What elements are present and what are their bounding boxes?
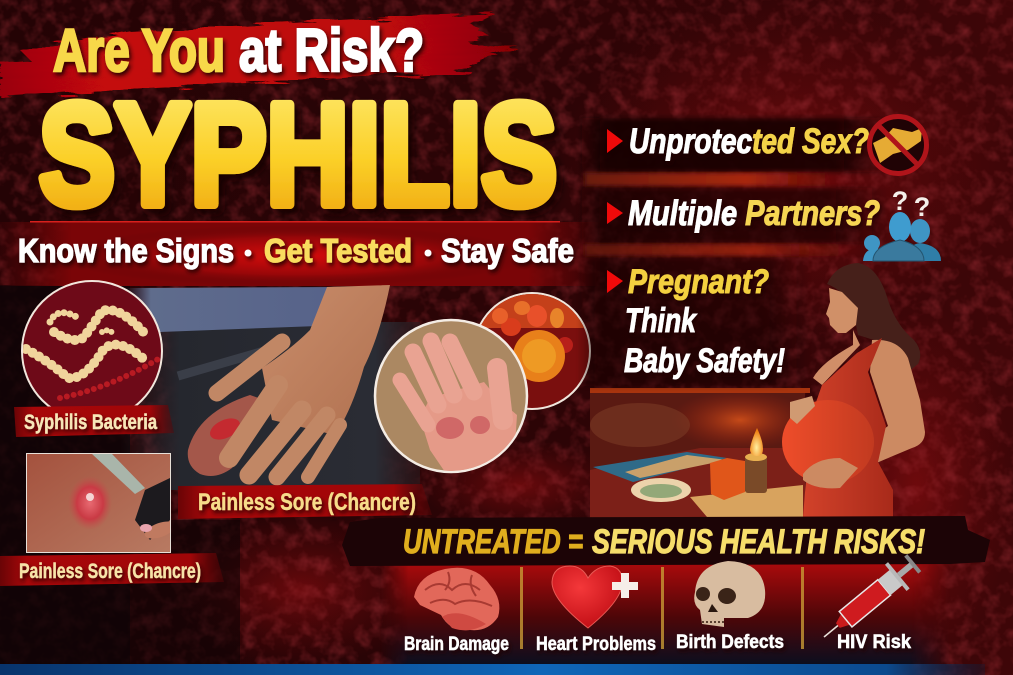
heading: Are You at Risk?	[53, 17, 424, 84]
label: Syphilis Bacteria: Syphilis Bacteria	[24, 411, 157, 434]
row: Multiple Partners	[607, 194, 880, 233]
banner: untreated: UNTREATED =	[403, 523, 583, 561]
row: Pregnant	[607, 263, 785, 380]
illustration: pregnant woman	[782, 263, 925, 517]
icon: palm circle with rash	[375, 320, 527, 472]
text: Baby Safety!	[624, 342, 785, 380]
icon: syringe	[813, 549, 925, 650]
bowl	[631, 478, 691, 502]
tagline: Know the Signs	[18, 232, 234, 269]
orange cube	[710, 458, 745, 500]
heading brush stroke	[0, 12, 520, 98]
tagline: Get Tested	[264, 232, 412, 269]
icon labels	[404, 632, 911, 655]
arrow	[607, 202, 623, 224]
label: Painless Sore center: Painless Sore (Chancre)	[198, 489, 416, 516]
icon: prohibited sign	[868, 115, 928, 175]
red subtitle band	[0, 221, 600, 287]
face	[826, 288, 858, 333]
title: SYPHILIS: SYPHILIS	[39, 74, 557, 235]
lower hand	[803, 458, 858, 488]
chest skin	[813, 330, 860, 385]
icon: question marks and people	[863, 186, 941, 261]
jeans waistband	[125, 287, 340, 332]
candle	[745, 428, 767, 493]
panel: health risk icons band	[380, 560, 950, 664]
dress	[803, 338, 893, 517]
arrow	[607, 270, 623, 293]
pocket seam	[178, 345, 285, 376]
banner: untreated: SERIOUS HEALTH RISKS!	[592, 523, 925, 561]
hair	[827, 263, 920, 372]
text	[624, 263, 785, 380]
icon: bacteria circle	[22, 281, 162, 421]
icon labels: Brain Damage	[404, 634, 509, 655]
icon labels: Heart Problems	[536, 634, 656, 655]
table surface	[590, 448, 805, 517]
icon: skull	[694, 561, 765, 627]
arrow	[607, 129, 623, 153]
heading: Are You at Risk?: Are You	[53, 17, 225, 84]
tagline	[18, 232, 574, 269]
text: Pregnant?	[628, 263, 769, 301]
panel: risk row backgrounds	[580, 118, 900, 386]
upper hand	[790, 396, 815, 424]
jeans dark fabric	[120, 322, 420, 490]
bottom blue strip	[0, 664, 985, 675]
icon labels: Birth Defects	[676, 632, 784, 653]
tagline: Stay Safe	[441, 232, 574, 269]
icon labels: HIV Risk	[837, 632, 911, 653]
arm	[838, 340, 925, 472]
banner: untreated	[342, 516, 990, 566]
icon: question marks and people: ?	[914, 192, 930, 222]
skin shape with sore	[188, 395, 264, 476]
text: Unprotected Sex?	[629, 122, 869, 161]
hand	[217, 285, 390, 477]
panel: table scene	[590, 428, 805, 517]
icon: brain	[414, 568, 499, 630]
label: Syphilis Bacteria	[14, 405, 174, 437]
heading: Are You at Risk?: at Risk?	[239, 17, 424, 84]
icon: orange cells circle	[474, 293, 590, 409]
icon: heart with plus	[552, 566, 638, 628]
label: Painless Sore center	[178, 484, 432, 519]
label: Painless Sore left: Painless Sore (Chancre)	[19, 560, 201, 583]
photo: painless sore	[26, 453, 177, 553]
flame	[750, 428, 763, 456]
icon: question marks and people: ?	[892, 186, 908, 216]
paper	[690, 485, 803, 517]
text: Think	[625, 302, 698, 340]
label: Painless Sore left	[0, 553, 224, 586]
text: Multiple Partners?	[628, 194, 880, 233]
scene backdrop: textured table wall	[590, 388, 810, 518]
row: Unprotected Sex	[607, 122, 869, 161]
belly	[782, 400, 874, 484]
panel: jeans and hand photo	[120, 285, 420, 490]
book	[593, 452, 727, 482]
